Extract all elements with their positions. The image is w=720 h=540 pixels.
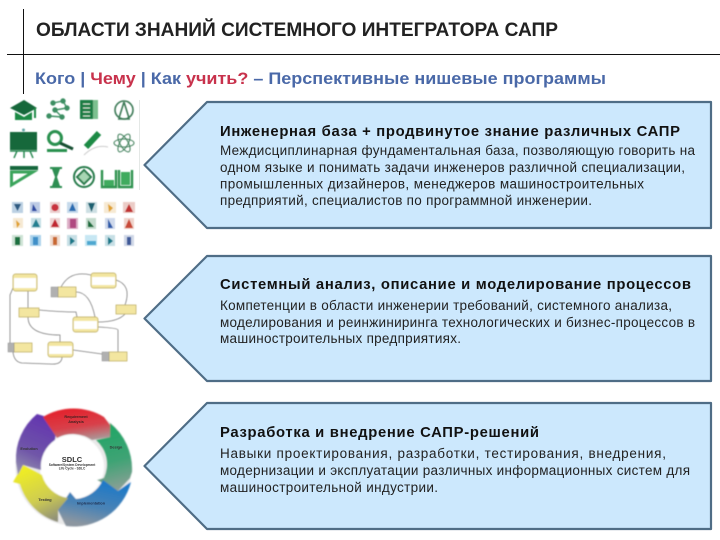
text: разработка и внедрение: Навыки проектирования, разработки, тестирования, внедрения, — [220, 446, 666, 461]
panel: системный анализ — [144, 256, 711, 381]
icon: flasks — [102, 170, 132, 187]
text: разработка и внедрение: машиностроительной индустрии. — [220, 480, 438, 495]
text: инженерная база: одном языке и понимать задачи инженеров различной специализации, — [220, 160, 685, 175]
diagram: data flow — [8, 273, 136, 364]
icon: graduation cap — [10, 100, 37, 120]
icon: pencil — [84, 133, 108, 155]
panel: инженерная база — [144, 102, 711, 228]
diagram label: SDLC: Software/System Development — [49, 463, 96, 467]
text: инженерная база: промышленных дизайнеров, менеджеров машиностроительных — [220, 176, 644, 192]
text: инженерная база — [220, 143, 695, 208]
heading: системный анализ: Системный анализ, описание и моделирование процессов — [220, 277, 691, 293]
panel: разработка и внедрение — [144, 403, 711, 529]
heading: разработка и внедрение: Разработка и внедрение САПР-решений — [220, 425, 539, 441]
diagram: SDLC cycle — [13, 409, 132, 527]
text: системный анализ: моделирования и реинжиниринга технологических и бизнес-процессов в — [220, 315, 695, 330]
diagram label: SDLC: Life Cycle - SDLC — [59, 466, 86, 470]
heading: инженерная база: Инженерная база + продвинутое знание различных САПР — [220, 124, 680, 140]
icons: green discipline icons — [10, 99, 134, 188]
text: инженерная база: предприятий, специалистов по программной инженерии. — [220, 193, 592, 208]
text: разработка и внедрение — [220, 446, 690, 495]
text: системный анализ: машиностроительных предприятиях. — [220, 331, 461, 346]
icon: magnifier — [47, 132, 73, 150]
icon: presentation board — [10, 128, 37, 158]
process boxes — [13, 273, 136, 361]
diagram label: SDLC: SDLC — [62, 455, 83, 464]
segment: testing — [13, 465, 68, 522]
icon: hourglass — [50, 167, 62, 188]
title: ОБЛАСТИ ЗНАНИЙ СИСТЕМНОГО ИНТЕГРАТОРА САПР — [36, 17, 558, 41]
icons: software logo grid — [12, 202, 135, 246]
subtitle: Кого | Чему | Как учить? – Перспективные нишевые программы — [35, 69, 606, 88]
text: инженерная база: Междисциплинарная фундаментальная база, позволяющую говорить на — [220, 143, 695, 158]
icon: ferris wheel — [115, 101, 133, 119]
icon: molecule network — [47, 99, 69, 119]
text: системный анализ — [220, 298, 695, 346]
icon: compass — [74, 167, 94, 187]
diagram label: SDLC: Evolution — [20, 447, 38, 451]
segment: design — [96, 423, 132, 491]
diagram label: SDLC: Implementation — [77, 502, 106, 506]
segment: requirement — [43, 409, 110, 440]
icon: set square — [10, 166, 38, 185]
diagram label: SDLC: Design — [110, 446, 123, 450]
segment: evolution — [16, 414, 57, 475]
diagram label: SDLC: Testing — [38, 498, 52, 502]
diagram label: SDLC: Requirement — [64, 415, 88, 419]
icon: atom — [114, 132, 134, 154]
icon: notebook — [80, 100, 98, 119]
segment: implementation — [58, 480, 131, 527]
arrows — [10, 274, 127, 364]
diagram label: SDLC: Analysis — [68, 420, 84, 424]
text: разработка и внедрение: модернизации и эксплуатации различных информационных систем для — [220, 463, 690, 478]
diagram label: SDLC — [20, 415, 123, 506]
text: системный анализ: Компетенции в области инженерии требований, системного анализа, — [220, 298, 672, 313]
